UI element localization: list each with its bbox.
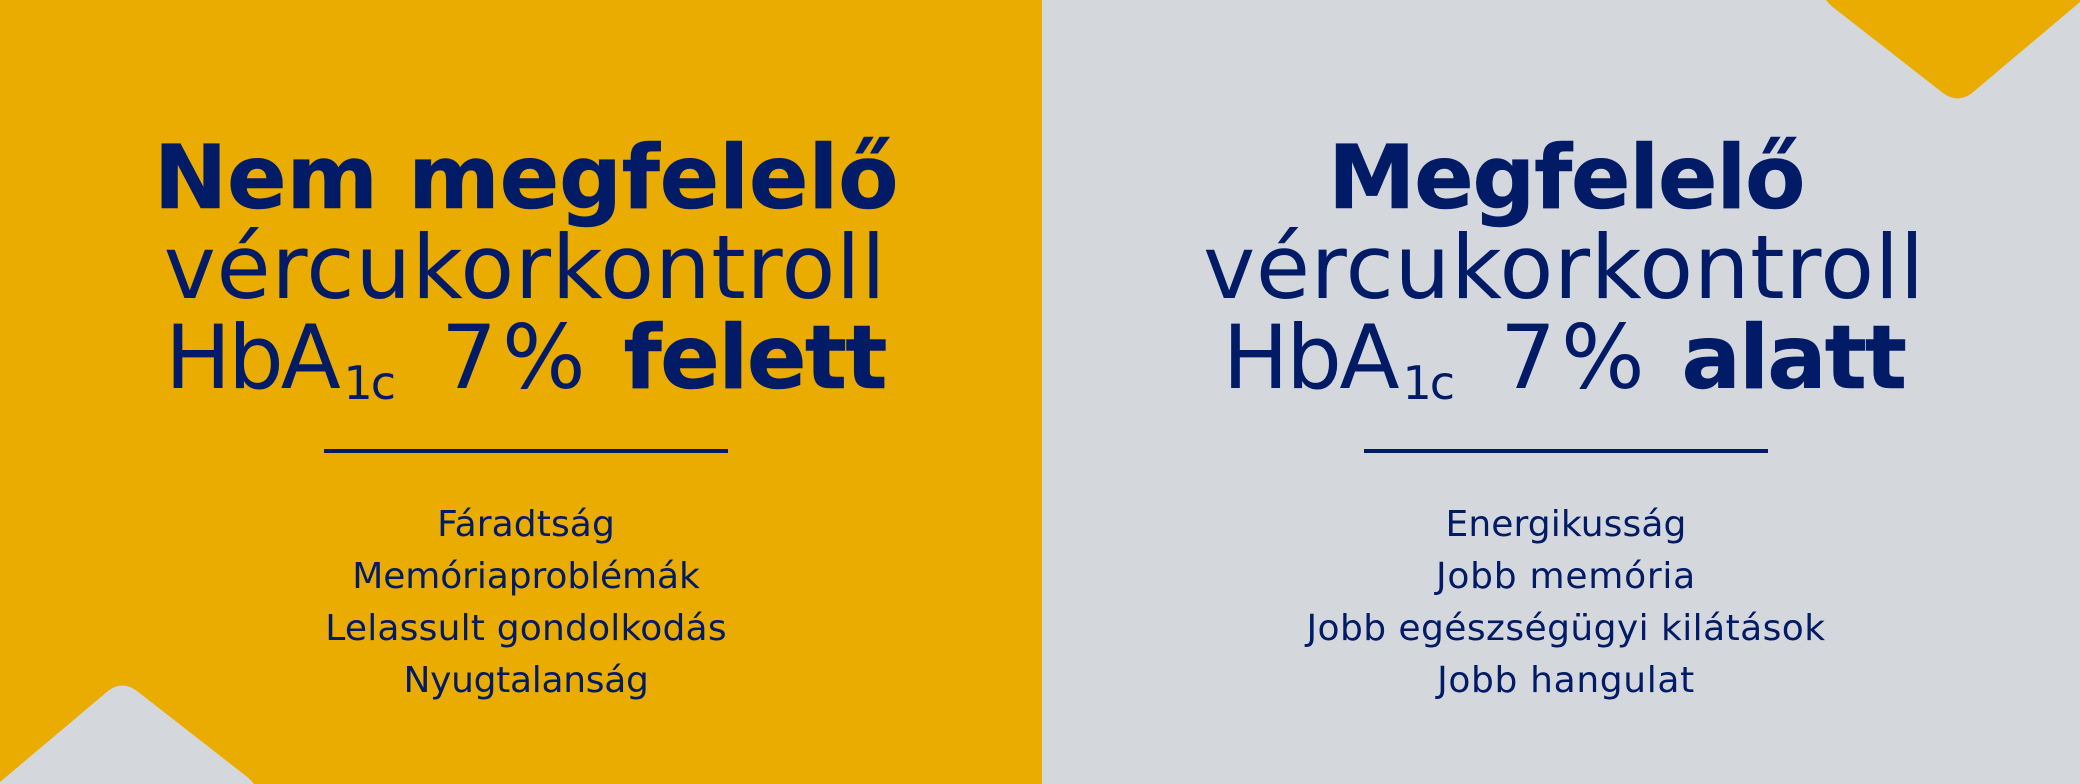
heading: inadequate control: vércukorkontroll (164, 216, 886, 318)
benefit list: Jobb egészségügyi kilátások (1306, 608, 1826, 649)
heading: inadequate control (154, 126, 898, 410)
symptom list (325, 504, 727, 701)
panel: inadequate control (0, 0, 1042, 784)
divider (1364, 449, 1768, 453)
heading: adequate control (1203, 126, 1925, 410)
heading: adequate control: alatt (1682, 306, 1905, 408)
heading: adequate control: 1c (1402, 356, 1453, 410)
heading: adequate control: 7% (1500, 306, 1650, 408)
benefit list: Energikusság (1446, 504, 1686, 545)
heading: adequate control: HbA (1222, 306, 1397, 408)
panel: adequate control (1042, 0, 2080, 784)
heading: inadequate control: 7% (441, 306, 591, 408)
benefit list: Jobb memória (1436, 556, 1696, 597)
icon: corner shape bottom left (0, 686, 254, 784)
heading: inadequate control: 1c (344, 356, 394, 410)
heading: adequate control: Megfelelő (1328, 126, 1804, 228)
symptom list: Memóriaproblémák (352, 556, 700, 597)
symptom list: Nyugtalanság (403, 660, 649, 701)
divider (324, 449, 728, 453)
heading: inadequate control: Nem megfelelő (154, 126, 898, 228)
benefit list: Jobb hangulat (1437, 660, 1695, 701)
symptom list: Fáradtság (437, 504, 615, 545)
heading: adequate control: vércukorkontroll (1203, 216, 1925, 318)
heading: inadequate control: HbA (165, 306, 338, 408)
heading: inadequate control: felett (624, 306, 886, 408)
icon: corner shape top right (1826, 0, 2080, 98)
symptom list: Lelassult gondolkodás (325, 608, 727, 649)
benefit list (1304, 504, 1826, 701)
